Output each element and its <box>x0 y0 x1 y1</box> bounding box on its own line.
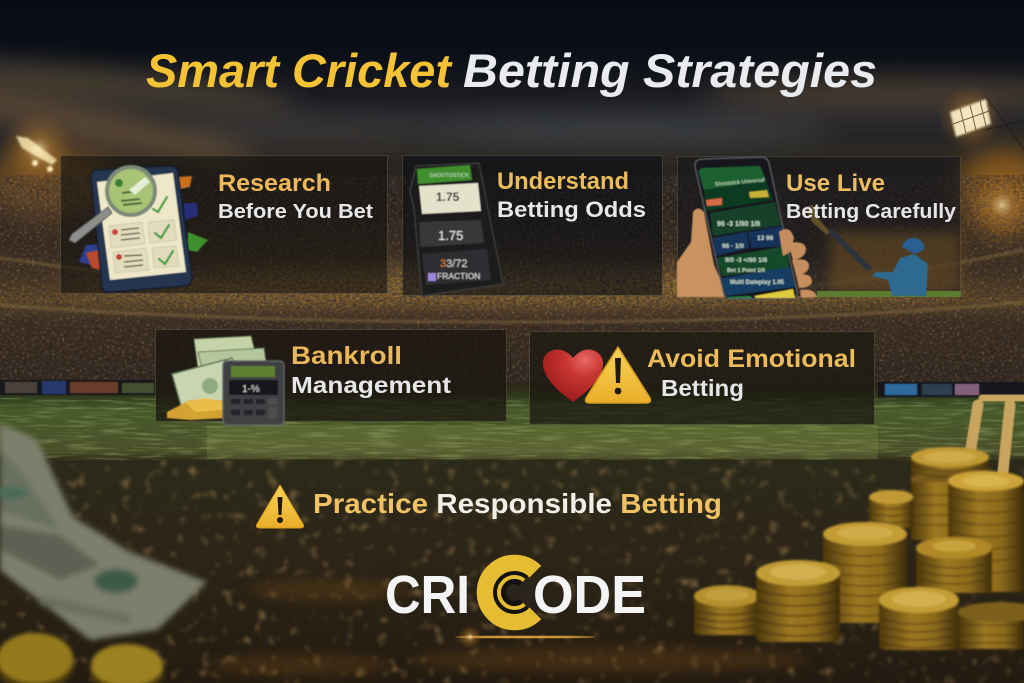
icon: warning triangle <box>586 347 650 403</box>
illustration: coins bottom left <box>0 633 164 683</box>
logo: cricode <box>385 563 646 625</box>
heading: use live: Use Live <box>786 170 885 197</box>
icon: phone in hand: 9/0 -3 </80 1/8 <box>725 257 767 264</box>
heading: bankroll: Bankroll <box>291 342 402 370</box>
logo: cricode: CRI <box>385 565 470 625</box>
text: practice responsible betting: Practice Responsible Betting <box>313 488 722 519</box>
heading: understand: Understand <box>497 168 629 195</box>
icon: phone in hand: 13 96 <box>757 235 774 242</box>
icon: warning triangle small <box>256 485 304 528</box>
subheading: betting: Betting <box>661 375 744 401</box>
heading: avoid emotional: Avoid Emotional <box>647 345 856 373</box>
panel: research before you bet <box>60 156 388 294</box>
icon: clipboard and magnifier <box>69 166 208 292</box>
icon: phone in hand: Multi Dateplay 1.95 <box>730 280 785 286</box>
icon: odds device: SHOOTOSTICK <box>429 173 469 179</box>
icon: odds device: 1.75 <box>436 190 460 204</box>
dirt dust <box>0 460 1024 683</box>
title: Smart Cricket <box>146 44 453 97</box>
icon: heart <box>543 349 603 402</box>
icon: phone in hand: 96 -3 1/80 1/8 <box>717 221 760 228</box>
illustration: gold wicket <box>967 398 1024 472</box>
heading: research: Research <box>218 170 331 197</box>
logo: cricode: ODE <box>533 565 646 625</box>
floodlights <box>0 112 76 188</box>
subheading: betting odds: Betting Odds <box>497 197 646 222</box>
icon: phone in hand <box>677 157 817 299</box>
panel: bankroll management <box>156 330 506 425</box>
icon: odds device: 33/72 <box>440 258 468 270</box>
icon: odds device: FRACTION <box>437 271 480 281</box>
icon: cash and calculator: 1-% <box>242 384 260 395</box>
title: Betting Strategies <box>463 44 877 97</box>
title <box>146 44 877 97</box>
callout: practice responsible betting <box>256 485 722 528</box>
illustration: gold coin stacks <box>694 447 1024 650</box>
subheading: management: Management <box>291 372 451 398</box>
subheading: before you bet: Before You Bet <box>218 201 373 223</box>
panel: avoid emotional betting <box>530 332 874 424</box>
clouds <box>0 52 1024 295</box>
panel: understand betting odds <box>402 156 662 296</box>
illustration: blurred banknote <box>0 423 207 640</box>
subheading: betting carefully: Betting Carefully <box>786 201 957 223</box>
icon: batsman <box>805 205 928 296</box>
icon: cash and calculator <box>167 336 284 425</box>
icon: phone in hand: Shootstick Universal <box>715 178 765 188</box>
advertising boards <box>0 380 1024 397</box>
grass <box>0 398 1024 460</box>
icon: odds device: 1.75 <box>438 228 463 243</box>
icon: gold c <box>485 563 544 622</box>
icon: odds device <box>410 163 503 296</box>
icon: phone in hand: Bet 1 Point 1/0 <box>727 268 765 274</box>
crowd texture <box>0 175 1024 383</box>
stadium tier lines <box>0 250 1024 322</box>
panel: use live betting carefully <box>677 156 961 299</box>
icon: phone in hand: 96 · 1/0 <box>722 243 744 250</box>
